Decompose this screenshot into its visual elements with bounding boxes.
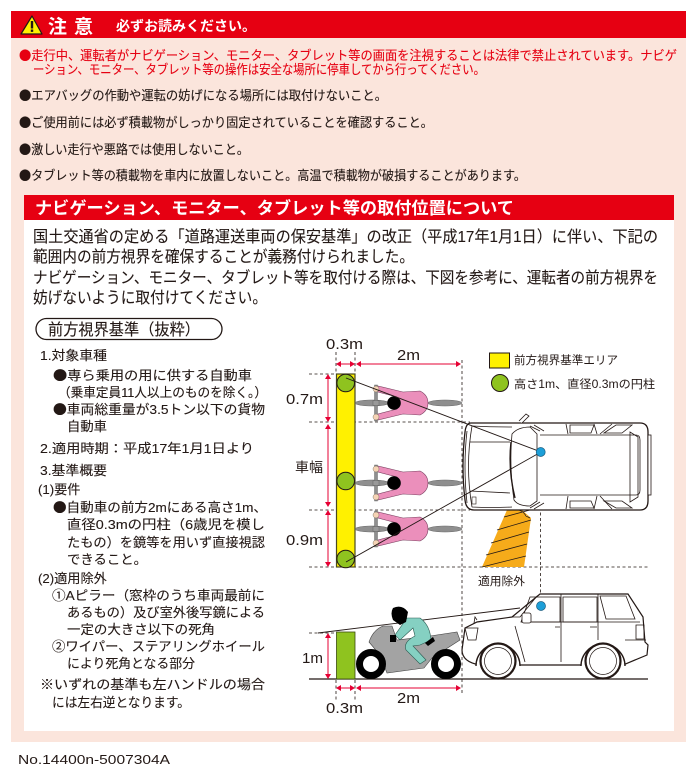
driver eye point	[536, 448, 545, 456]
bullet: heat: ●タブレット等の積載物を車内に放置しないこと。高温で積載物が破損することがあります。	[19, 165, 526, 184]
green cylinders	[337, 374, 355, 568]
text block: standard details: 直径0.3mの円柱（6歳児を模し	[67, 517, 265, 532]
red warning: ーション、モニター、タブレット等の操作は安全な場所に停車してから行ってください。	[33, 62, 485, 77]
dimension labels: 車幅	[295, 460, 323, 475]
part number: No.14400n-5007304A	[18, 752, 170, 767]
text block: standard details: ①Aピラー（窓枠のうち車両最前に	[52, 587, 265, 603]
heading: please read: 必ずお読みください。	[116, 18, 256, 34]
motorcycle and rider	[360, 607, 460, 676]
dimension arrows	[325, 361, 461, 567]
car top view	[463, 414, 651, 518]
text block: standard details: ●車両総重量が3.5トン以下の貨物	[53, 399, 265, 418]
diagram: top view	[286, 336, 651, 695]
guide lines	[309, 352, 648, 695]
text block: standard details: できること。	[67, 552, 147, 567]
side dimension arrows	[325, 633, 461, 691]
dimension labels: 0.3m	[326, 336, 363, 353]
side dimension labels: 0.3m	[326, 700, 363, 717]
text block: standard details: ※いずれの基準も左ハンドルの場合	[40, 677, 265, 692]
side dimension labels: 1m	[302, 650, 323, 667]
dimension labels: 0.7m	[286, 391, 323, 408]
dimension labels: 2m	[397, 347, 420, 364]
side dimension labels	[302, 650, 420, 717]
text block: standard details: により死角となる部分	[67, 656, 195, 671]
text block: standard details: には左右逆となります。	[52, 695, 190, 710]
ground line	[309, 678, 648, 680]
intro paragraph	[33, 228, 658, 307]
legend	[490, 353, 656, 392]
dimension labels: 適用除外	[478, 574, 526, 588]
intro paragraph: 範囲内の前方視界を確保することが義務付けられました。	[33, 248, 414, 266]
red warning: ●走行中、運転者がナビゲーション、モニター、タブレット等の画面を注視することは法律で禁止されています。ナビゲ	[19, 45, 677, 64]
bullet: rough road: ●激しい走行や悪路では使用しないこと。	[19, 139, 249, 158]
diagram: side view	[302, 594, 648, 717]
legend: 高さ1m、直径0.3mの円柱	[514, 377, 656, 391]
text block: standard details: 自動車	[67, 419, 107, 434]
car side view	[462, 594, 648, 678]
sight lines	[346, 378, 541, 562]
green cylinder side	[336, 632, 355, 679]
text block: standard details: たもの）を鏡等を用いず直接視認	[67, 534, 265, 550]
text block: standard details: (2)適用除外	[38, 571, 107, 586]
bicycle riders	[355, 385, 462, 547]
text block: standard details: 2.適用時期：平成17年1月1日より	[40, 441, 254, 456]
text block: standard details: 3.基準概要	[40, 463, 107, 478]
section heading bar	[24, 195, 674, 220]
heading: caution: 注 意	[48, 16, 93, 38]
pill heading: forward visibility standard	[36, 318, 222, 340]
panel: mounting position	[24, 220, 674, 731]
text block: standard details: ②ワイパー、ステアリングホイール	[52, 639, 265, 654]
exclusion hatch	[482, 510, 531, 567]
intro paragraph: 妨げないように取付けてください。	[33, 289, 267, 307]
text block: standard details: あるもの）及び室外後写鏡による	[67, 605, 265, 620]
text block: standard details	[38, 348, 267, 710]
text block: standard details: （乗車定員11人以上のものを除く。）	[58, 385, 267, 400]
caution header bar	[11, 11, 686, 38]
pill heading: forward visibility standard: 前方視界基準（抜粋）	[48, 321, 200, 339]
dimension labels: 0.9m	[286, 532, 323, 549]
text block: standard details: 一定の大きさ以下の死角	[67, 622, 215, 637]
dimension labels	[286, 336, 526, 588]
icon: warning triangle	[21, 16, 42, 34]
text block: standard details: (1)要件	[38, 482, 80, 497]
text block: standard details: ●専ら乗用の用に供する自動車	[53, 365, 252, 384]
section heading bar: ナビゲーション、モニター、タブレット等の取付位置について	[35, 198, 514, 218]
side sight line	[318, 608, 520, 633]
text block: standard details: 1.対象車種	[40, 348, 107, 363]
bullet: airbag: ●エアバッグの作動や運転の妨げになる場所には取付けないこと。	[19, 85, 387, 104]
yellow standard area	[336, 374, 355, 567]
bullet: secure load: ●ご使用前には必ず積載物がしっかり固定されていることを確認すること。	[19, 112, 433, 131]
text block: caution list	[19, 45, 677, 184]
side dimension labels: 2m	[397, 690, 420, 707]
red warning	[19, 45, 677, 77]
text block: standard details: ●自動車の前方2mにある高さ1m、	[53, 497, 267, 516]
legend: 前方視界基準エリア	[514, 353, 618, 367]
driver eye point side	[536, 602, 546, 610]
intro paragraph: 国土交通省の定める「道路運送車両の保安基準」の改正（平成17年1月1日）に伴い、下記の	[33, 228, 658, 246]
